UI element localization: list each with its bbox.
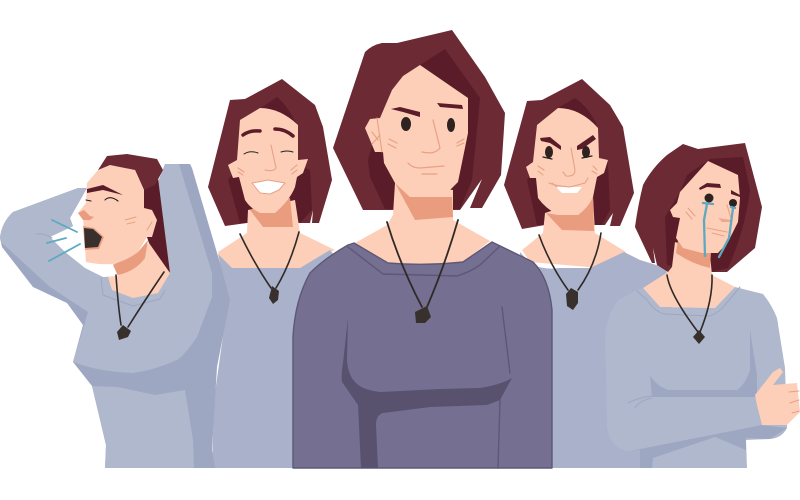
figure: centre confident woman <box>293 30 552 468</box>
figure: crying woman <box>605 143 800 468</box>
figure: stern grinning woman <box>504 79 672 468</box>
figure: smiling woman <box>208 79 340 468</box>
figure: yawning woman <box>0 154 230 468</box>
